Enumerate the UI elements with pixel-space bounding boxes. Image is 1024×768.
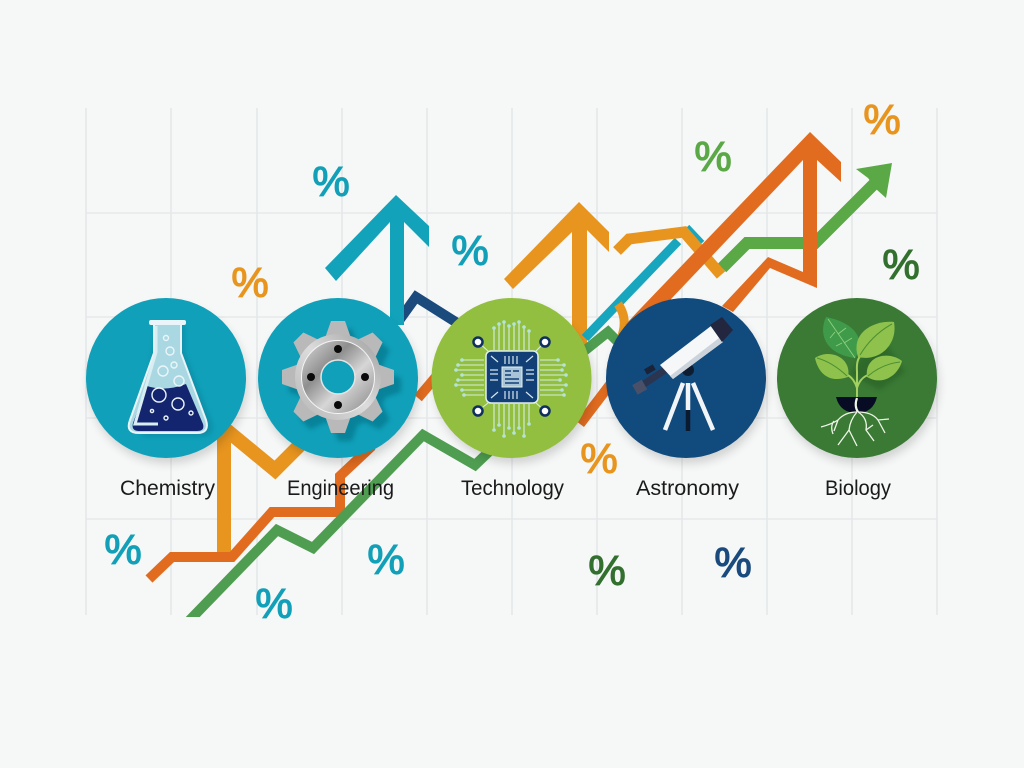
panel: technology	[432, 298, 593, 463]
panel: astronomy	[606, 298, 767, 463]
arrow: bright green	[722, 163, 892, 268]
arrow: dark orange large	[625, 132, 841, 325]
percent: navy bottom: %	[714, 539, 752, 586]
line: mid green hidden segment	[583, 332, 628, 352]
line: dark orange lower	[149, 446, 372, 579]
line: cyan cap	[686, 228, 701, 244]
line: dark orange middle	[580, 382, 612, 424]
panel: engineering	[258, 298, 419, 463]
line: orange fragment	[618, 304, 624, 336]
icon: gear	[282, 321, 401, 441]
line: orange arm	[617, 232, 721, 275]
percent: cyan bottom centre: %	[367, 536, 405, 583]
percent: dark green right: %	[882, 241, 920, 288]
line: green lower	[185, 435, 496, 625]
chart: rising arrows and lines	[149, 132, 892, 625]
percent: orange centre: %	[580, 435, 618, 482]
line: navy	[398, 297, 462, 326]
percent: cyan middle: %	[451, 227, 489, 274]
arrow: cyan	[325, 195, 429, 325]
line: orange lower	[224, 428, 312, 553]
icon: flask	[129, 320, 212, 436]
arrow: orange	[504, 202, 609, 345]
line: cyan rising	[585, 241, 678, 338]
percent: cyan top: %	[312, 158, 350, 205]
percent: cyan bottom left: %	[104, 526, 142, 573]
percent: cyan bottom: %	[255, 580, 293, 627]
line: dark orange fragment left of technology	[418, 372, 440, 398]
icon: plant	[815, 317, 905, 446]
icon: telescope	[632, 317, 733, 431]
panel: biology	[777, 298, 938, 463]
label: Technology: Technology	[461, 477, 564, 500]
percent: green top: %	[694, 133, 732, 180]
percent: dark green bottom: %	[588, 547, 626, 594]
label: Engineering: Engineering	[287, 477, 394, 500]
percent signs	[104, 96, 920, 627]
percent: orange top right: %	[863, 96, 901, 143]
label: Astronomy: Astronomy	[636, 477, 740, 500]
panel: chemistry	[86, 298, 247, 463]
percent: orange left: %	[231, 259, 269, 306]
icon: circuit chip	[454, 320, 568, 438]
label: Biology: Biology	[825, 477, 891, 500]
label: Chemistry: Chemistry	[120, 477, 215, 500]
